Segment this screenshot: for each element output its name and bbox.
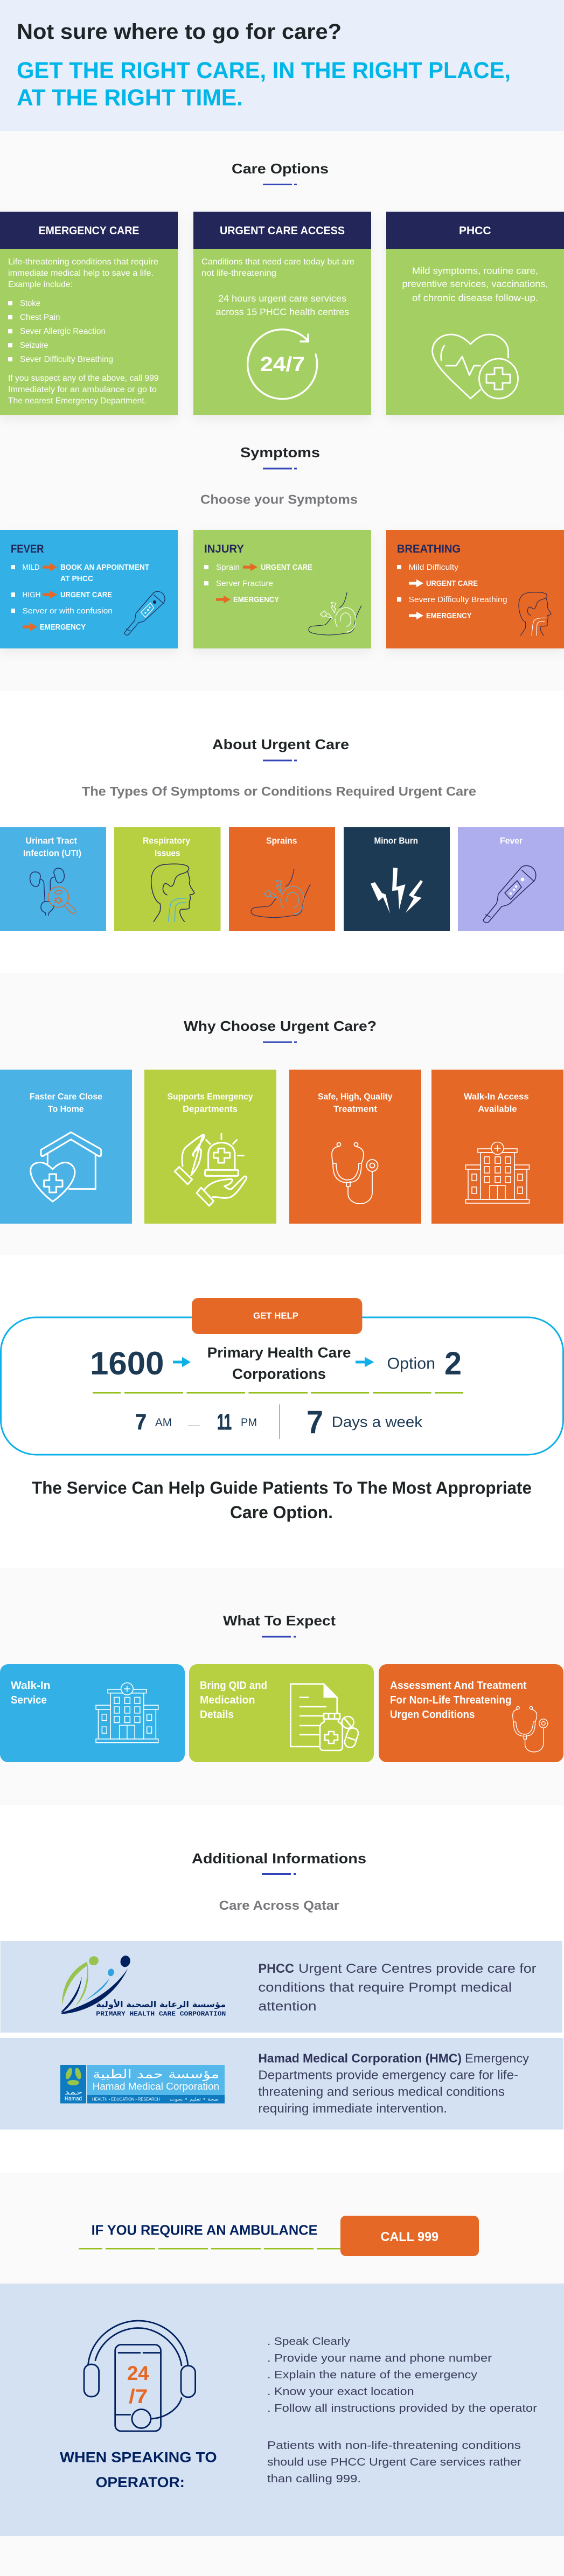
emergency care description: Chest Pain <box>20 313 60 322</box>
emergency care description: Immediately for an ambulance or go to <box>8 385 157 394</box>
card: faster care close to home: Faster Care Close <box>30 1092 102 1102</box>
logo: hamad medical corporation: Hamad Medical Corporation <box>93 2081 219 2092</box>
icon: phone with headset <box>84 2321 196 2431</box>
guidance statement: Care Option. <box>230 1503 333 1522</box>
operator instructions: . Speak Clearly <box>267 2336 350 2348</box>
panel: get help <box>1 1298 563 1455</box>
breathing list: EMERGENCY <box>426 612 472 620</box>
icon: kidneys and magnifier <box>30 868 76 915</box>
icon: thermometer <box>483 865 536 923</box>
days a week: 7 <box>307 1404 323 1440</box>
phcc information text: conditions that require Prompt medical <box>258 1980 512 1995</box>
opening hours: 11 <box>217 1409 232 1434</box>
card: walk-in access available: Available <box>478 1104 517 1114</box>
panel: fever <box>0 530 178 648</box>
phcc information text: Urgent Care Centres provide care for <box>298 1961 537 1976</box>
emergency care description <box>8 257 159 406</box>
emergency care description: Sever Allergic Reaction <box>20 327 106 336</box>
primary health care corporations: Corporations <box>232 1366 326 1382</box>
icon: sprained foot <box>251 869 310 918</box>
primary health care corporations <box>207 1344 351 1382</box>
guidance statement: The Service Can Help Guide Patients To The Most Appropriate <box>32 1478 532 1497</box>
icon: phone with headset: /7 <box>129 2385 148 2407</box>
card: respiratory issues: Issues <box>155 849 180 858</box>
card: walk-in access available <box>431 1070 563 1224</box>
urgent care description: 24 hours urgent care services <box>218 293 346 304</box>
arrow <box>356 1357 374 1367</box>
emergency care description: Sever Difficulty Breathing <box>20 355 113 364</box>
section heading: about urgent care: About Urgent Care <box>212 736 349 752</box>
guidance statement <box>32 1478 532 1522</box>
opening hours: PM <box>241 1416 257 1429</box>
breathing list: Mild Difficulty <box>408 563 459 572</box>
panel: urgent care access: URGENT CARE ACCESS <box>220 225 345 237</box>
subheading: care across qatar: Care Across Qatar <box>219 1898 339 1913</box>
header slogan: GET THE RIGHT CARE, IN THE RIGHT PLACE, <box>17 58 511 83</box>
logo: hamad medical corporation: حمد <box>65 2089 82 2097</box>
card: urinary tract infection: Urinart Tract <box>26 836 77 846</box>
section heading: additional informations <box>192 1851 366 1875</box>
urgent care description: across 15 PHCC health centres <box>216 306 349 317</box>
operator instructions: . Know your exact location <box>267 2386 414 2398</box>
ambulance call to action: IF YOU REQUIRE AN AMBULANCE <box>92 2222 318 2238</box>
operator instructions: . Explain the nature of the emergency <box>267 2369 477 2381</box>
panel: hamad medical corporation information <box>0 2038 563 2130</box>
logo: primary health care corporation: مؤسسة الرعاية الصحية الأولية <box>96 2000 226 2009</box>
icon: hospital <box>465 1142 529 1203</box>
section heading: care options: Care Options <box>232 160 329 177</box>
card: safe high quality treatment: Safe, High, Quality <box>318 1092 393 1102</box>
opening hours: 7 <box>135 1409 147 1434</box>
card: sprains <box>229 827 335 931</box>
panel: emergency care: EMERGENCY CARE <box>39 225 139 237</box>
get help button: GET HELP <box>253 1311 298 1321</box>
injury list: Server Fracture <box>216 580 273 588</box>
operator instructions: . Provide your name and phone number <box>267 2352 492 2364</box>
card: sprains: Sprains <box>266 836 297 846</box>
panel: breathing: BREATHING <box>397 543 461 555</box>
card: faster care close to home <box>0 1070 132 1224</box>
section heading: symptoms: Symptoms <box>240 444 320 460</box>
breathing list: Severe Difficulty Breathing <box>408 596 507 604</box>
when speaking to operator heading: WHEN SPEAKING TO <box>60 2449 217 2466</box>
section heading: care options <box>232 160 329 185</box>
icon: head and airway <box>519 592 551 636</box>
non-life-threatening advice: Patients with non-life-threatening conditions <box>267 2440 521 2452</box>
panel: injury <box>193 530 371 648</box>
section heading: about urgent care <box>212 736 349 762</box>
injury list <box>204 563 312 604</box>
phcc information text: attention <box>258 1999 317 2014</box>
section heading: symptoms <box>240 444 320 470</box>
fever list: URGENT CARE <box>60 591 112 599</box>
phcc description <box>402 265 548 303</box>
logo: hamad medical corporation: HEALTH • EDUCATION • RESEARCH <box>92 2097 160 2102</box>
option 2: 2 <box>444 1345 462 1381</box>
phcc description: Mild symptoms, routine care, <box>412 265 538 276</box>
urgent care description <box>201 257 354 317</box>
card: fever: Fever <box>500 836 523 846</box>
phone number 1600: 1600 <box>90 1345 164 1381</box>
logo: primary health care corporation <box>61 1954 226 2018</box>
panel: urgent care access <box>193 212 371 415</box>
icon: hospital <box>96 1683 158 1743</box>
logo: primary health care corporation: PRIMARY HEALTH CARE CORPORATION <box>96 2011 226 2018</box>
panel: phcc <box>386 212 564 415</box>
card: urinary tract infection <box>0 827 106 931</box>
emergency care description: Life-threatening conditions that require <box>8 257 158 267</box>
urgent care description: Canditions that need care today but are <box>201 257 354 267</box>
subheading: types of symptoms: The Types Of Symptoms or Conditions Required Urgent Care <box>82 784 476 799</box>
section heading: why choose urgent care: Why Choose Urgent Care? <box>184 1018 377 1034</box>
card: minor burn: Minor Burn <box>374 836 418 846</box>
urgent care description: not life-threatening <box>201 269 276 278</box>
card: bring qid and medication details: Details <box>200 1709 234 1721</box>
icon: thermometer <box>124 591 165 635</box>
header slogan: AT THE RIGHT TIME. <box>17 85 243 111</box>
section heading: why choose urgent care <box>184 1018 377 1043</box>
when speaking to operator heading: OPERATOR: <box>96 2474 185 2490</box>
injury list: URGENT CARE <box>261 563 312 572</box>
hamad information text: Hamad Medical Corporation (HMC) <box>258 2051 462 2065</box>
option 2: Option <box>387 1355 435 1372</box>
card: assessment and treatment: Assessment And Treatment <box>390 1680 527 1692</box>
ambulance call to action <box>79 2216 479 2256</box>
card: supports emergency departments: Departments <box>183 1104 238 1114</box>
card: respiratory issues <box>114 827 221 931</box>
fever list: MILD <box>23 563 40 572</box>
logo: hamad medical corporation: مؤسسة حمد الطبية <box>93 2068 219 2081</box>
days a week <box>307 1404 423 1440</box>
icon: stethoscope <box>332 1143 378 1204</box>
hamad information text: requiring immediate intervention. <box>258 2102 447 2116</box>
fever list: AT PHCC <box>60 575 94 583</box>
non-life-threatening advice: should use PHCC Urgent Care services rather <box>267 2456 521 2468</box>
icon: home with heart <box>31 1132 101 1202</box>
icon: phone with headset: 24 <box>127 2362 149 2384</box>
phcc information text: PHCC <box>258 1961 294 1976</box>
emergency care description: Seizuire <box>20 341 48 350</box>
card: walk-in service: Service <box>11 1694 47 1706</box>
icon: document and medicine <box>291 1684 360 1750</box>
phcc description: of chronic disease follow-up. <box>412 292 538 303</box>
card: supports emergency departments: Supports Emergency <box>167 1092 253 1102</box>
emergency care description: The nearest Emergency Department. <box>8 396 147 406</box>
icon: injured foot <box>309 592 361 635</box>
emergency care description: Example include: <box>8 280 73 289</box>
panel: fever: FEVER <box>11 543 44 555</box>
operator instructions: . Follow all instructions provided by the operator <box>267 2403 537 2414</box>
arrow <box>173 1357 191 1367</box>
card: faster care close to home: To Home <box>48 1104 84 1114</box>
panel: phcc information <box>1 1941 562 2033</box>
when speaking to operator heading <box>60 2449 217 2490</box>
fever list: EMERGENCY <box>40 623 86 632</box>
card: safe high quality treatment <box>289 1070 421 1224</box>
panel: injury: INJURY <box>204 543 244 555</box>
card: safe high quality treatment: Treatment <box>333 1104 378 1114</box>
header question: Not sure where to go for care? <box>17 20 342 44</box>
phcc description: preventive services, vaccinations, <box>402 278 548 289</box>
card: minor burn <box>344 827 450 931</box>
header slogan <box>17 58 511 111</box>
hamad information text <box>258 2051 530 2116</box>
icon: 24/7 clock <box>248 330 317 399</box>
phcc information text <box>258 1961 537 2014</box>
panel: emergency care <box>0 212 178 415</box>
logo: hamad medical corporation <box>60 2065 225 2104</box>
card: bring qid and medication details: Bring QID and <box>200 1680 267 1692</box>
emergency care description: immediate medical help to save a life. <box>8 269 154 278</box>
card: supports emergency departments <box>144 1070 276 1224</box>
injury list: EMERGENCY <box>233 596 279 604</box>
card: bring qid and medication details <box>189 1664 374 1762</box>
non-life-threatening advice: than calling 999. <box>267 2473 361 2485</box>
fever list <box>11 563 149 632</box>
icon: head and airway <box>151 864 194 922</box>
logo: hamad medical corporation: صحة • تعليم • بحوث <box>170 2097 219 2102</box>
operator instructions <box>267 2336 537 2414</box>
panel: breathing <box>386 530 564 648</box>
emergency care description: If you suspect any of the above, call 999 <box>8 374 159 383</box>
fever list: Server or with confusion <box>23 607 113 616</box>
opening hours: AM <box>155 1416 172 1429</box>
icon: 24/7 clock: 24/7 <box>260 353 305 376</box>
hamad information text: Departments provide emergency care for life- <box>258 2068 518 2082</box>
non-life-threatening advice <box>267 2440 521 2485</box>
hamad information text: Emergency <box>465 2051 530 2065</box>
fever list: BOOK AN APPOINTMENT <box>60 563 149 572</box>
call 999 button <box>340 2216 479 2256</box>
option 2 <box>387 1345 462 1381</box>
card: assessment and treatment <box>379 1664 563 1762</box>
icon: hands and siren <box>175 1134 247 1206</box>
days a week: Days a week <box>332 1413 423 1430</box>
breathing list: URGENT CARE <box>426 580 478 588</box>
get help button <box>192 1298 362 1334</box>
fever list: HIGH <box>23 591 41 599</box>
hamad information text: threatening and serious medical conditions <box>258 2084 505 2098</box>
card: walk-in service <box>0 1664 185 1762</box>
icon: lightning bolts <box>371 868 423 913</box>
header panel <box>0 0 564 131</box>
card: walk-in service: Walk-In <box>11 1680 51 1692</box>
subheading: choose your symptoms: Choose your Symptoms <box>200 492 358 507</box>
card: assessment and treatment: Urgen Conditions <box>390 1709 475 1721</box>
panel: phcc: PHCC <box>459 225 491 237</box>
card: bring qid and medication details: Medication <box>200 1694 255 1706</box>
card: fever <box>458 827 564 931</box>
emergency care description: Stoke <box>20 299 40 308</box>
panel: when speaking to operator <box>0 2284 564 2536</box>
breathing list <box>397 563 507 620</box>
section heading: what to expect: What To Expect <box>223 1612 336 1629</box>
injury list: Sprain <box>216 563 240 572</box>
icon: stethoscope <box>513 1706 548 1752</box>
card: urinary tract infection: Infection (UTI) <box>23 849 81 858</box>
section heading: additional informations: Additional Informations <box>192 1851 366 1867</box>
card: respiratory issues: Respiratory <box>143 836 191 846</box>
card: walk-in access available: Walk-In Access <box>464 1092 529 1102</box>
card: assessment and treatment: For Non-Life Threatening <box>390 1694 512 1706</box>
logo: hamad medical corporation: Hamad <box>65 2096 82 2102</box>
call 999 button: CALL 999 <box>380 2230 438 2244</box>
opening hours <box>135 1409 257 1434</box>
icon: heart with cross <box>433 334 518 399</box>
primary health care corporations: Primary Health Care <box>207 1344 351 1360</box>
section heading: what to expect <box>223 1612 336 1637</box>
